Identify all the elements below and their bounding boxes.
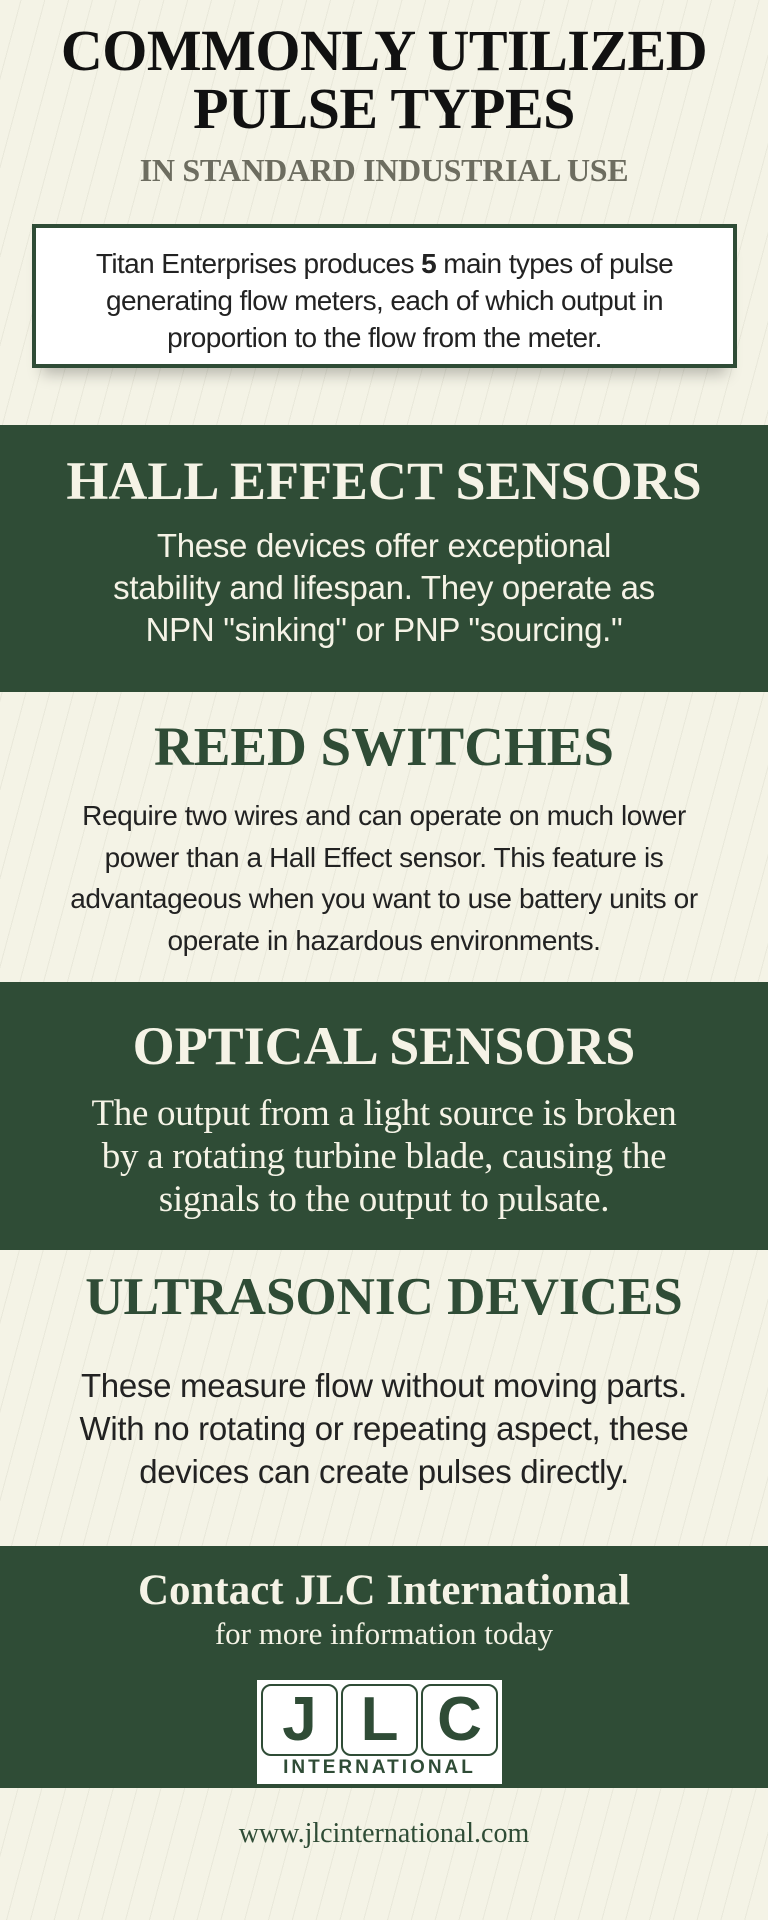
subtitle: IN STANDARD INDUSTRIAL USE [140,152,628,188]
text: reed switches: Require two wires and can operate on much lower [82,800,686,831]
text: hall effect: These devices offer exceptional [157,527,611,564]
title: COMMONLY UTILIZED [61,18,707,83]
logo: INTERNATIONAL [283,1757,476,1778]
text: ultrasonic: With no rotating or repeating aspect, these [80,1410,688,1447]
logo: J [282,1685,317,1754]
logo [257,1680,502,1784]
intro box [32,224,737,368]
text: reed switches: operate in hazardous environments. [167,924,601,956]
panel: contact [0,1546,768,1788]
url: www.jlcinternational.com [239,1818,529,1849]
text: optical: by a rotating turbine blade, causing the [102,1136,666,1177]
text: hall effect: stability and lifespan. They operate as [113,569,655,606]
text: optical: signals to the output to pulsate. [159,1179,609,1220]
panel: optical [0,982,768,1250]
text: hall effect [113,527,655,648]
text: ultrasonic: devices can create pulses directly. [139,1453,629,1490]
text: contact sub: for more information today [215,1616,553,1651]
logo: L [361,1685,398,1754]
text: ultrasonic [80,1367,688,1490]
intro box: generating flow meters, each of which output in [106,285,663,316]
intro box: Titan Enterprises produces 5 main types of pulse [96,248,673,279]
text: reed switches: advantageous when you want to use battery units or [70,883,698,914]
text: ultrasonic: These measure flow without moving parts. [81,1367,687,1404]
heading: contact: Contact JLC International [138,1567,630,1614]
heading: optical: OPTICAL SENSORS [133,1016,635,1076]
text: optical [91,1093,676,1220]
text: hall effect: NPN "sinking" or PNP "sourcing." [146,611,622,648]
title [61,18,707,141]
title: PULSE TYPES [193,76,575,141]
heading: hall effect: HALL EFFECT SENSORS [66,451,702,511]
text: optical: The output from a light source is broken [91,1093,676,1134]
intro box: proportion to the flow from the meter. [167,322,602,353]
heading: reed switches: REED SWITCHES [154,716,614,777]
panel: hall effect [0,425,768,692]
logo: C [437,1685,482,1754]
text: reed switches [70,800,698,956]
text: reed switches: power than a Hall Effect sensor. This feature is [105,842,663,872]
heading: ultrasonic: ULTRASONIC DEVICES [85,1268,683,1326]
